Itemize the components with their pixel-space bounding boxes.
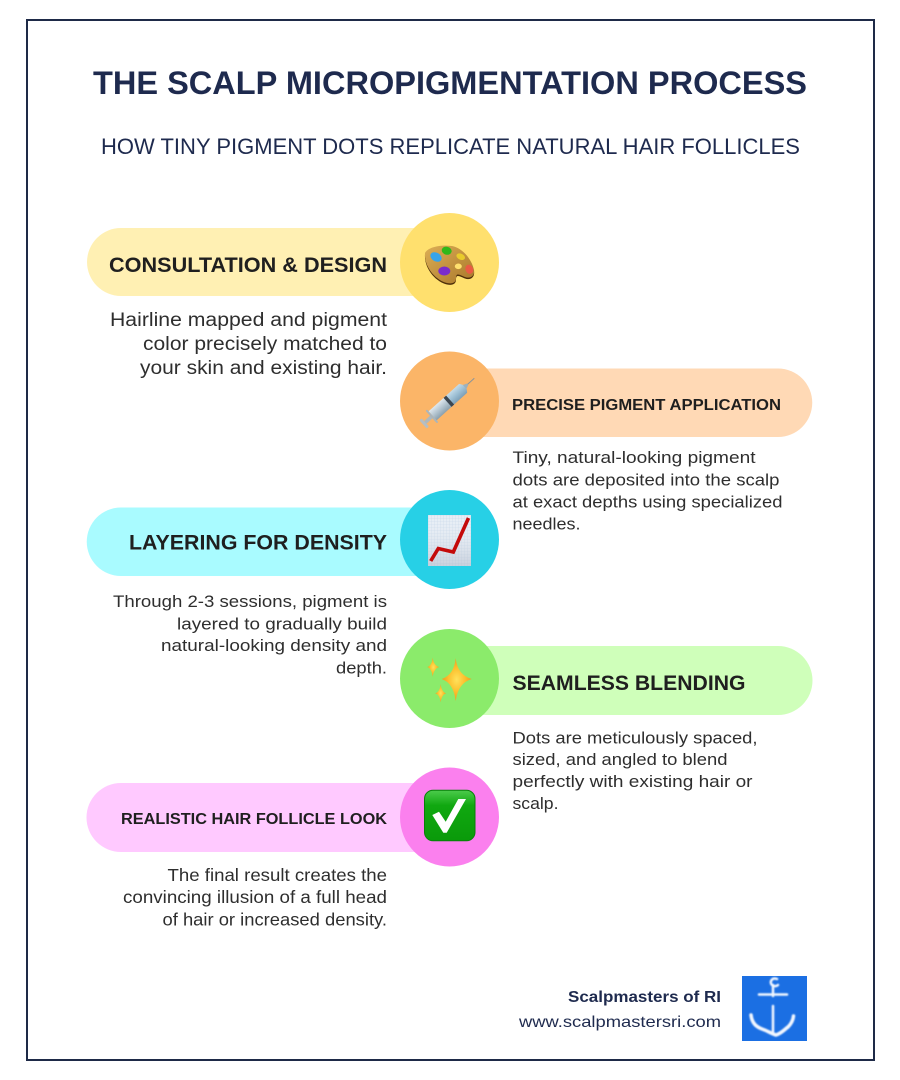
circle: step 1 [400, 213, 499, 312]
text: step 3 description: natural-looking density and [161, 636, 387, 655]
circle: step 4 [400, 629, 499, 728]
heading: step 4: SEAMLESS BLENDING [512, 672, 746, 695]
pill: step 2 [450, 368, 812, 437]
website: www.scalpmastersri.com [518, 1014, 721, 1031]
text: step 1 description: Hairline mapped and pigment [110, 310, 388, 331]
heading: step 5: REALISTIC HAIR FOLLICLE LOOK [121, 811, 387, 828]
text: step 2 description: dots are deposited into the scalp [512, 470, 780, 490]
text: step 4 description: sized, and angled to blend [512, 750, 728, 769]
pill: step 5 [87, 783, 450, 852]
text: step 5 description: The final result creates the [168, 865, 387, 885]
text: step 3 description [113, 592, 387, 678]
text: step 3 description: layered to gradually build [177, 614, 387, 634]
text: step 5 description: of hair or increased density. [162, 909, 387, 929]
icon: syringe [417, 372, 480, 431]
text: step 1 description: color precisely matched to [143, 334, 387, 355]
text: step 5 description [123, 865, 387, 929]
icon: check mark button [424, 790, 475, 841]
pill: step 1 [87, 228, 450, 296]
heading: step 2: PRECISE PIGMENT APPLICATION [512, 397, 781, 414]
heading: step 1: CONSULTATION & DESIGN [109, 254, 387, 277]
circle: step 5 [400, 768, 499, 866]
text: step 3 description: depth. [336, 658, 387, 678]
text: step 2 description: needles. [512, 514, 580, 534]
icon: artist palette [425, 246, 475, 285]
panel: step 1 consultation and design [87, 213, 499, 379]
icon: sparkles [427, 658, 472, 702]
text: step 1 description: your skin and existing hair. [140, 358, 387, 379]
text: step 1 description [110, 310, 388, 379]
circle: step 2 [400, 352, 499, 450]
footer: brand [518, 989, 721, 1031]
icon: chart increasing [428, 515, 471, 566]
circle: step 3 [400, 490, 499, 589]
text: step 4 description: perfectly with existing hair or [512, 772, 753, 791]
text: step 2 description [512, 448, 782, 534]
panel: step 5 realistic hair follicle look [87, 768, 499, 929]
heading: step 3: LAYERING FOR DENSITY [129, 532, 387, 554]
subtitle: HOW TINY PIGMENT DOTS REPLICATE NATURAL HAIR FOLLICLES [101, 134, 800, 159]
panel: step 2 precise pigment application [400, 352, 812, 534]
pill: step 4 [450, 646, 813, 715]
title: THE SCALP MICROPIGMENTATION PROCESS [93, 65, 807, 101]
text: step 5 description: convincing illusion of a full head [123, 887, 387, 907]
brand name: Scalpmasters of RI [568, 989, 721, 1006]
text: step 3 description: Through 2-3 sessions, pigment is [113, 592, 387, 611]
panel: step 3 layering for density [87, 490, 499, 678]
text: step 4 description [512, 728, 758, 813]
pill: step 3 [87, 508, 450, 576]
text: step 4 description: scalp. [512, 794, 558, 813]
text: step 2 description: at exact depths using specialized [512, 492, 782, 512]
text: step 4 description: Dots are meticulously spaced, [512, 728, 758, 747]
icon: anchor logo [742, 976, 807, 1041]
panel: step 4 seamless blending [400, 629, 813, 813]
text: step 2 description: Tiny, natural-looking pigment [512, 448, 756, 467]
